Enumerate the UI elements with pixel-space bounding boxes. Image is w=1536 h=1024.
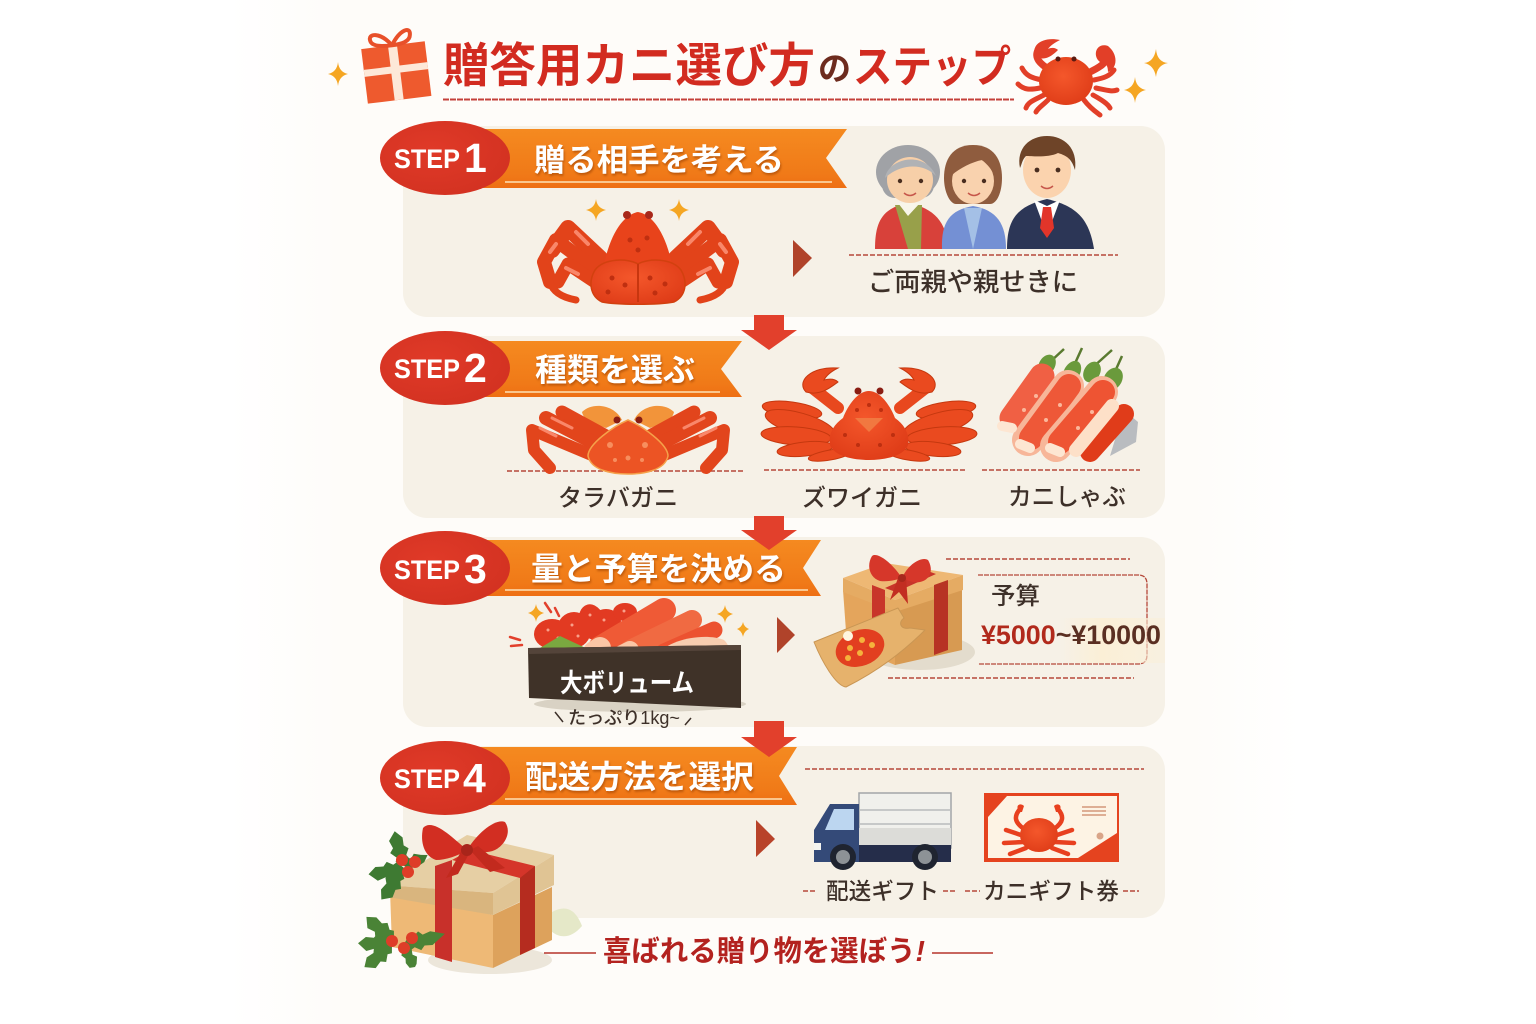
panel background	[403, 746, 1165, 918]
step label: STEP	[394, 555, 460, 585]
panel background	[403, 336, 1165, 518]
middle woman	[942, 206, 1006, 249]
step heading: 配送方法を選択	[525, 759, 754, 795]
panel: step 2	[380, 331, 1165, 518]
step badge	[380, 531, 510, 605]
icon: gift box with tag	[814, 555, 975, 687]
bow	[422, 825, 467, 860]
icon: crab box	[510, 601, 749, 712]
icon: king crab	[544, 211, 732, 304]
strawberries	[534, 601, 637, 649]
icon: sparkle right top	[1144, 49, 1168, 77]
caption: タラバガニ	[558, 485, 678, 512]
panel: step 3	[380, 531, 1165, 728]
volume note: たっぷり1kg~	[568, 708, 680, 728]
icon: tarabagani	[532, 406, 724, 474]
panel: step 1	[380, 121, 1165, 317]
box body	[390, 890, 493, 968]
step number: 1	[464, 135, 487, 181]
panel background	[403, 126, 1165, 317]
budget box	[888, 559, 1165, 678]
icon: crab shabu legs	[1002, 348, 1138, 456]
ribbon	[480, 747, 797, 805]
arrow: step 3 to 4	[741, 721, 797, 757]
step number: 2	[464, 345, 487, 391]
icon: delivery truck	[814, 793, 951, 870]
panel: step 4	[380, 741, 1165, 918]
icon: sparkles	[586, 199, 689, 221]
icon: title crab	[1018, 39, 1117, 115]
closing message: 喜ばれる贈り物を選ぼう!	[603, 935, 925, 968]
bow	[869, 555, 902, 581]
ribbon	[435, 860, 452, 962]
box	[528, 645, 741, 708]
elder woman	[875, 203, 948, 249]
title particle: の	[818, 50, 851, 87]
step heading: 量と予算を決める	[531, 551, 786, 587]
step label: STEP	[394, 354, 460, 384]
title text end: ステップ	[853, 43, 1011, 92]
step number: 4	[463, 755, 486, 801]
budget label: 予算	[991, 583, 1040, 610]
step number: 3	[464, 546, 487, 592]
holly bottom	[358, 910, 447, 975]
crab legs	[594, 610, 714, 654]
tag	[814, 608, 925, 687]
step badge	[380, 741, 510, 815]
title text: 贈答用カニ選び方	[443, 39, 815, 92]
caption: ご両親や親せきに	[868, 267, 1078, 297]
icon: gift card	[984, 793, 1119, 862]
ribbon	[480, 540, 821, 596]
box text: 大ボリューム	[560, 668, 694, 698]
faces	[898, 168, 1060, 183]
step badge	[380, 121, 510, 195]
arrow: step 2 to 3	[741, 516, 797, 550]
arrow	[756, 820, 775, 857]
caption: カニしゃぶ	[1008, 484, 1126, 511]
ribbon	[480, 129, 847, 188]
title underline	[443, 98, 1014, 100]
lid	[385, 835, 554, 893]
icon: sparkle left	[328, 62, 348, 86]
icon: zuwaigani	[760, 368, 978, 464]
step heading: 種類を選ぶ	[535, 352, 695, 388]
panel background	[403, 537, 1165, 727]
holly berries	[386, 854, 421, 954]
budget value: ¥5000~¥10000	[981, 620, 1161, 650]
step badge	[380, 331, 510, 405]
step label: STEP	[394, 764, 460, 794]
icon: large gift box	[358, 821, 582, 975]
arrow	[777, 617, 795, 653]
step heading: 贈る相手を考える	[534, 143, 784, 178]
icon: gift box	[360, 28, 431, 104]
caption gift ticket: カニギフト券	[983, 878, 1119, 904]
arrow: step 1 to 2	[741, 315, 797, 350]
title	[328, 28, 1168, 115]
arrow	[793, 240, 812, 277]
caption delivery: 配送ギフト	[826, 878, 939, 904]
man	[1007, 199, 1094, 249]
sparkles	[528, 604, 749, 637]
ribbon	[480, 341, 742, 397]
step label: STEP	[394, 144, 460, 174]
icon: family	[875, 136, 1094, 249]
caption: ズワイガニ	[802, 485, 922, 512]
holly top	[367, 829, 430, 905]
pale leaf	[550, 909, 582, 936]
icon: sparkle right bottom	[1124, 77, 1146, 103]
